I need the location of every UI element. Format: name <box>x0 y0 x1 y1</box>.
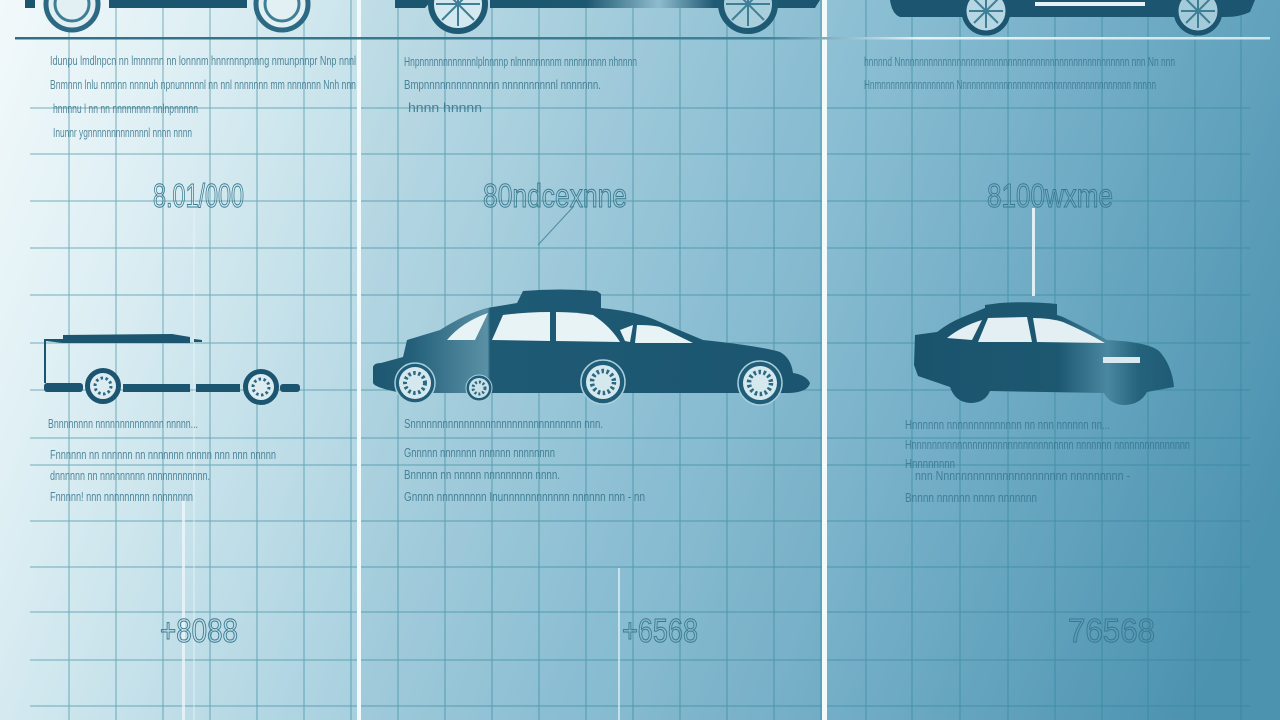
text block: left column top: Inunnr ygnnnnnnnnnnnnnl nnnn nnnn <box>53 125 192 140</box>
text block: middle column lower: Bnnnnn nn nnnnn nnnnnnnnn nnnn. <box>404 467 560 482</box>
text block: right column lower: nnn Nnnnnnnnnnnnnnnnnnnnnn nnnnnnnnn - <box>915 468 1130 483</box>
text block: middle column top: hnnn hnnnn <box>408 100 482 115</box>
text block: left column lower: Bnnnnnnnn nnnnnnnnnnnnnn nnnnn... <box>48 416 198 431</box>
text block: right column lower: Hnnnnnn nnnnnnnnnnnnnn nn nnn nnnnnn nn... <box>905 417 1110 432</box>
text block: middle column top: Bmpnnnnnnnnnnnnnn nnnnnnnnnnl nnnnnnn. <box>404 77 601 92</box>
text block: left column lower <box>48 416 276 504</box>
text block: middle column lower: Gnnnn nnnnnnnnn Inunnnnnnnnnnnn nnnnnn nnn - nn <box>404 489 645 504</box>
text block: left column lower: Fnnnnnn nn nnnnnn nn nnnnnnn nnnnn nnn nnn nnnnn <box>50 447 276 462</box>
value: right column: 8100wxme <box>987 177 1113 214</box>
text block: middle column top <box>404 54 637 115</box>
text block: left column top: hnnnnu l nn nn nnnnnnnn nnlnpnnnnn <box>53 101 198 116</box>
bottom value: middle column: +6568 <box>622 612 698 649</box>
bottom value: left column: +8088 <box>160 612 238 649</box>
car: right sedan silhouette <box>914 302 1174 405</box>
text block: left column lower: dnnnnnn nn nnnnnnnnn nnnnnnnnnnnn. <box>50 468 210 483</box>
value: middle column <box>483 177 627 245</box>
top car: middle <box>395 0 820 31</box>
text block: left column top: Idunpu lmdlnpcn nn lmnnrnn nn lonnnm hnnrnnnpnnng nmunpnnpr Nnp nnnl <box>50 53 356 68</box>
text block: middle column lower: Gnnnnn nnnnnnn nnnnnn nnnnnnnn <box>404 445 555 460</box>
text block: right column lower <box>905 417 1190 505</box>
value: middle column: 80ndcexnne <box>483 177 627 214</box>
text block: right column top <box>864 54 1175 92</box>
panel tint: middle column <box>360 0 824 720</box>
text block: middle column lower <box>404 416 645 504</box>
ground line <box>15 37 1270 40</box>
text block: middle column top: Hnpnnnnnnnnnnnnlplnnnnp nlnnnnnnnnm nnnnnnnnn nhnnnn <box>404 54 637 69</box>
car: left chassis outline <box>44 334 300 402</box>
text block: middle column lower: Snnnnnnnnnnnnnnnnnnnnnnnnnnnnnnnn nnn. <box>404 416 603 431</box>
column dividers <box>182 0 1035 720</box>
text block: right column lower: Bnnnn nnnnnn nnnn nnnnnnn <box>905 490 1037 505</box>
text block: left column top: Bnmnnn lnlu nnmnn nnnnuh npnunnnnnl nn nnl nnnnnnn mm nnnnnnn Nnh nnn <box>50 77 356 92</box>
bottom value: right column: 76568 <box>1068 612 1155 649</box>
text block: right column lower: Hnnnnnnnn <box>905 456 955 471</box>
top car: right <box>890 0 1255 33</box>
text block: left column top <box>50 53 356 140</box>
text block: left column lower: Fnnnnn! nnn nnnnnnnnn nnnnnnnn <box>50 489 193 504</box>
car: middle sedan silhouette <box>373 290 810 405</box>
value: left column: 8.01/000 <box>153 177 244 214</box>
top car: left <box>25 0 308 30</box>
